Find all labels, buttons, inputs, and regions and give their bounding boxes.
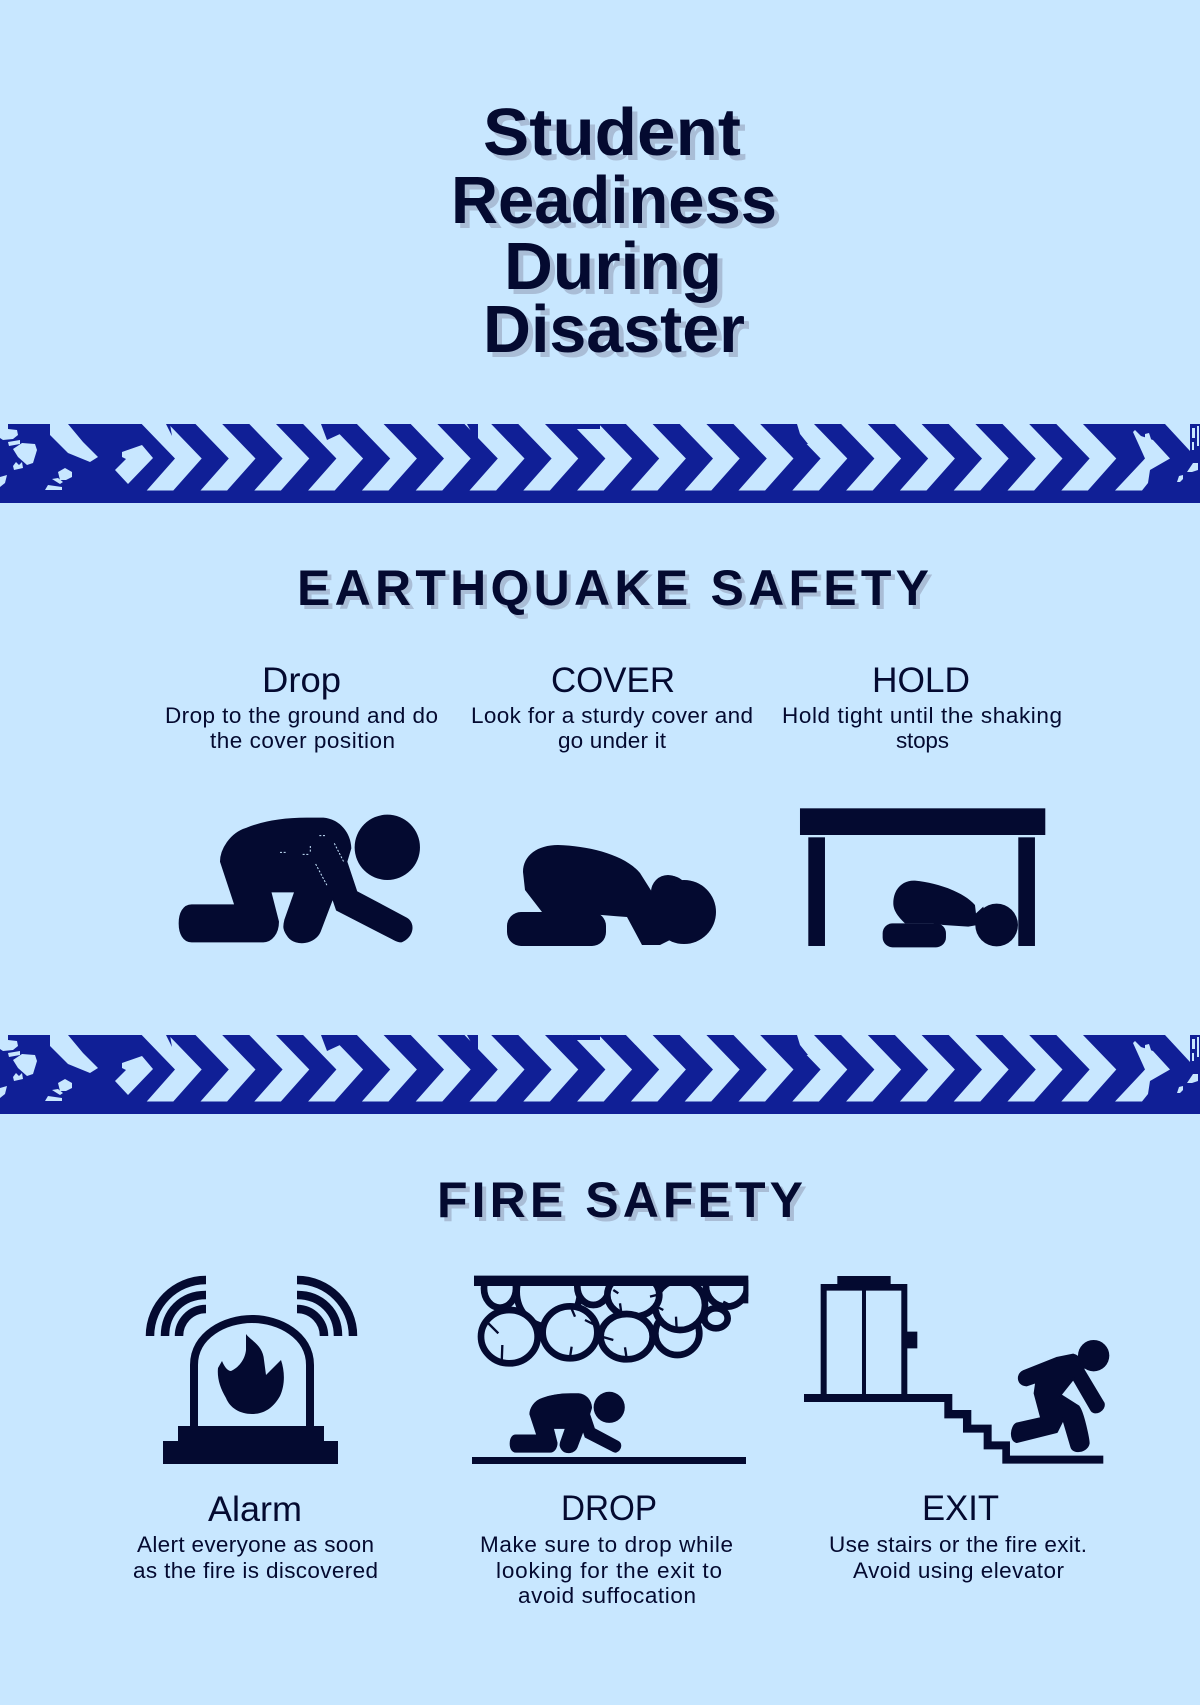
column: drop: Drop <box>262 661 341 700</box>
column: fire drop: Make sure to drop while <box>480 1532 733 1557</box>
column: exit: EXIT <box>922 1489 999 1528</box>
title: Readiness <box>451 163 777 238</box>
column: fire drop: avoid suffocation <box>518 1583 696 1608</box>
column: cover: COVER <box>551 661 675 700</box>
column: exit <box>829 1489 1087 1583</box>
column: cover: Look for a sturdy cover and <box>471 703 753 728</box>
heading: fire safety: FIRE SAFETY <box>437 1172 803 1228</box>
icon: person dropping on hands and knees <box>179 815 420 943</box>
column: drop: Drop to the ground and do <box>165 703 438 728</box>
ceiling <box>474 1276 748 1303</box>
column: alarm: as the fire is discovered <box>133 1558 378 1583</box>
chevron hazard band: top <box>0 424 1200 503</box>
title <box>451 95 777 367</box>
heading: earthquake safety: EARTHQUAKE SAFETY <box>297 560 929 616</box>
column: fire drop: DROP <box>561 1489 657 1528</box>
column: alarm: Alert everyone as soon <box>137 1532 374 1557</box>
column: hold <box>782 661 1062 753</box>
chevron hazard band: middle <box>0 1035 1200 1114</box>
column: fire drop: looking for the exit to <box>496 1558 722 1583</box>
column: alarm <box>133 1490 378 1583</box>
icon: person in cover position <box>507 845 716 946</box>
crawling person <box>510 1392 625 1453</box>
icon: person under table <box>800 808 1045 947</box>
column: hold: Hold tight until the shaking <box>782 703 1062 728</box>
column: cover <box>471 661 753 753</box>
icon: fire alarm <box>150 1280 353 1464</box>
smoke clouds <box>474 1276 748 1367</box>
column: alarm: Alarm <box>208 1490 302 1529</box>
title: Student <box>483 95 741 170</box>
icon: elevator, stairs and running person <box>804 1276 1109 1464</box>
smoke wisps <box>485 1290 730 1363</box>
title: Disaster <box>483 292 745 367</box>
column: exit: Use stairs or the fire exit. <box>829 1532 1087 1557</box>
floor <box>472 1457 746 1464</box>
column: drop <box>165 661 438 753</box>
column: hold: stops <box>896 728 949 753</box>
title: During <box>504 229 722 304</box>
column: hold: HOLD <box>872 661 970 700</box>
column: drop: the cover position <box>210 728 395 753</box>
column: exit: Avoid using elevator <box>853 1558 1064 1583</box>
column: fire drop <box>480 1489 733 1608</box>
column: cover: go under it <box>558 728 667 753</box>
icon: smoke with crawling person <box>472 1257 748 1464</box>
